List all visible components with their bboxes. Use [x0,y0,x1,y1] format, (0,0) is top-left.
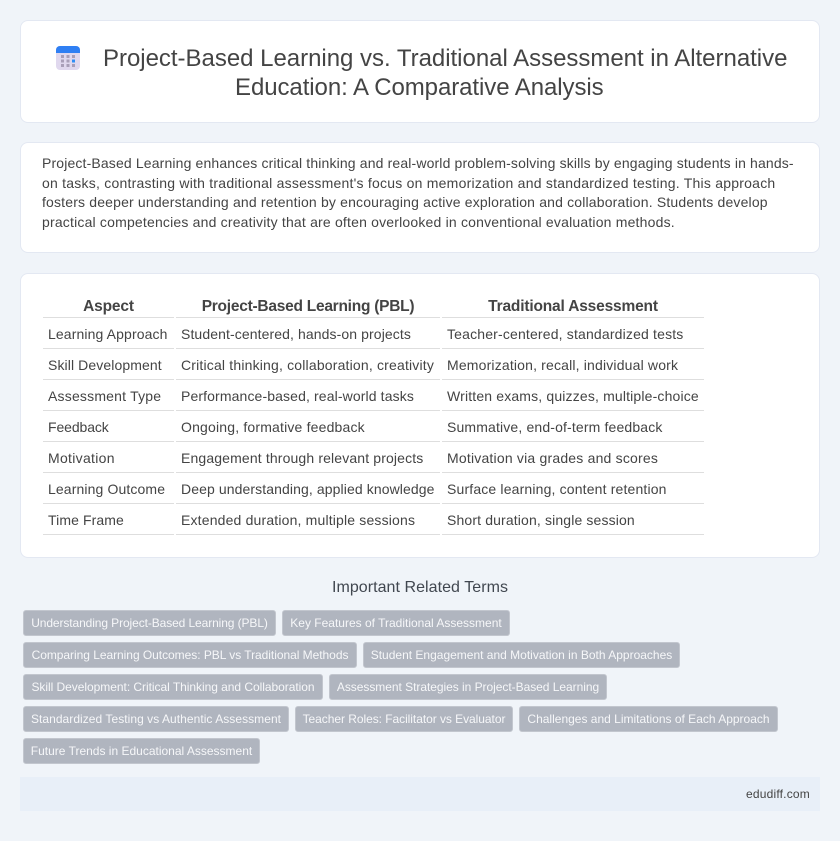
related terms tags: Student Engagement and Motivation in Both Approaches [371,648,672,662]
footer bar [20,777,820,811]
row: time frame: Short duration, single session [447,512,635,528]
footer source: edudiff.com [746,787,810,801]
row: learning approach [43,326,704,349]
row: skill development: Critical thinking, collaboration, creativity [181,357,434,373]
row: feedback: Feedback [48,419,109,435]
row: assessment type: Performance-based, real-world tasks [181,388,414,404]
row: assessment type: Written exams, quizzes, multiple-choice [447,388,699,404]
row: motivation [43,450,704,473]
header card [20,20,820,123]
summary card [20,142,820,253]
row: assessment type [43,388,704,411]
row: learning approach: Teacher-centered, standardized tests [447,326,683,342]
row: time frame [43,512,704,535]
title [103,45,787,101]
row: skill development [43,357,704,380]
row: learning approach: Learning Approach [48,326,168,342]
row: motivation: Motivation [48,450,115,466]
related terms tags: Understanding Project-Based Learning (PBL) [31,616,268,630]
header row: Project-Based Learning (PBL) [202,298,414,315]
row: time frame: Time Frame [48,512,124,528]
related terms tags: Challenges and Limitations of Each Approach [527,712,770,726]
row: learning outcome: Surface learning, content retention [447,481,667,497]
summary text: on tasks, contrasting with traditional assessment's focus on memorization and standardized testing. This approach [42,175,775,191]
row: feedback [43,419,704,442]
row: time frame: Extended duration, multiple sessions [181,512,415,528]
header row [43,298,704,318]
title: Education: A Comparative Analysis [235,74,604,101]
related terms heading: Important Related Terms [332,579,508,596]
summary text: Project-Based Learning enhances critical thinking and real-world problem-solving skills by engaging students in hands- [42,155,794,171]
summary text: fosters deeper understanding and retention by encouraging active exploration and collaboration. Students develop [42,194,768,210]
header row: Aspect [83,298,134,315]
related terms tags [23,610,778,764]
header row: Traditional Assessment [488,298,658,315]
related terms tags: Skill Development: Critical Thinking and Collaboration [31,680,315,694]
related terms tags: Standardized Testing vs Authentic Assessment [31,712,281,726]
related terms tags: Comparing Learning Outcomes: PBL vs Traditional Methods [32,648,348,662]
comparison table [43,298,704,535]
row: learning outcome: Deep understanding, applied knowledge [181,481,435,497]
title: Project-Based Learning vs. Traditional Assessment in Alternative [103,45,787,72]
row: feedback: Ongoing, formative feedback [181,419,365,435]
related terms tags: Teacher Roles: Facilitator vs Evaluator [303,712,505,726]
icon: calendar [56,46,80,70]
related terms tags: Key Features of Traditional Assessment [290,616,502,630]
row: motivation: Engagement through relevant projects [181,450,423,466]
table card [20,273,820,558]
row: feedback: Summative, end-of-term feedback [447,419,663,435]
row: skill development: Memorization, recall, individual work [447,357,678,373]
row: learning outcome [43,481,704,504]
row: assessment type: Assessment Type [48,388,161,404]
row: learning approach: Student-centered, hands-on projects [181,326,411,342]
row: motivation: Motivation via grades and scores [447,450,658,466]
row: skill development: Skill Development [48,357,162,373]
row: learning outcome: Learning Outcome [48,481,165,497]
related terms tags: Future Trends in Educational Assessment [31,744,252,758]
related terms tags: Assessment Strategies in Project-Based Learning [337,680,599,694]
summary text: practical competencies and creativity that are often overlooked in conventional evaluation methods. [42,214,675,230]
summary text [42,155,794,230]
